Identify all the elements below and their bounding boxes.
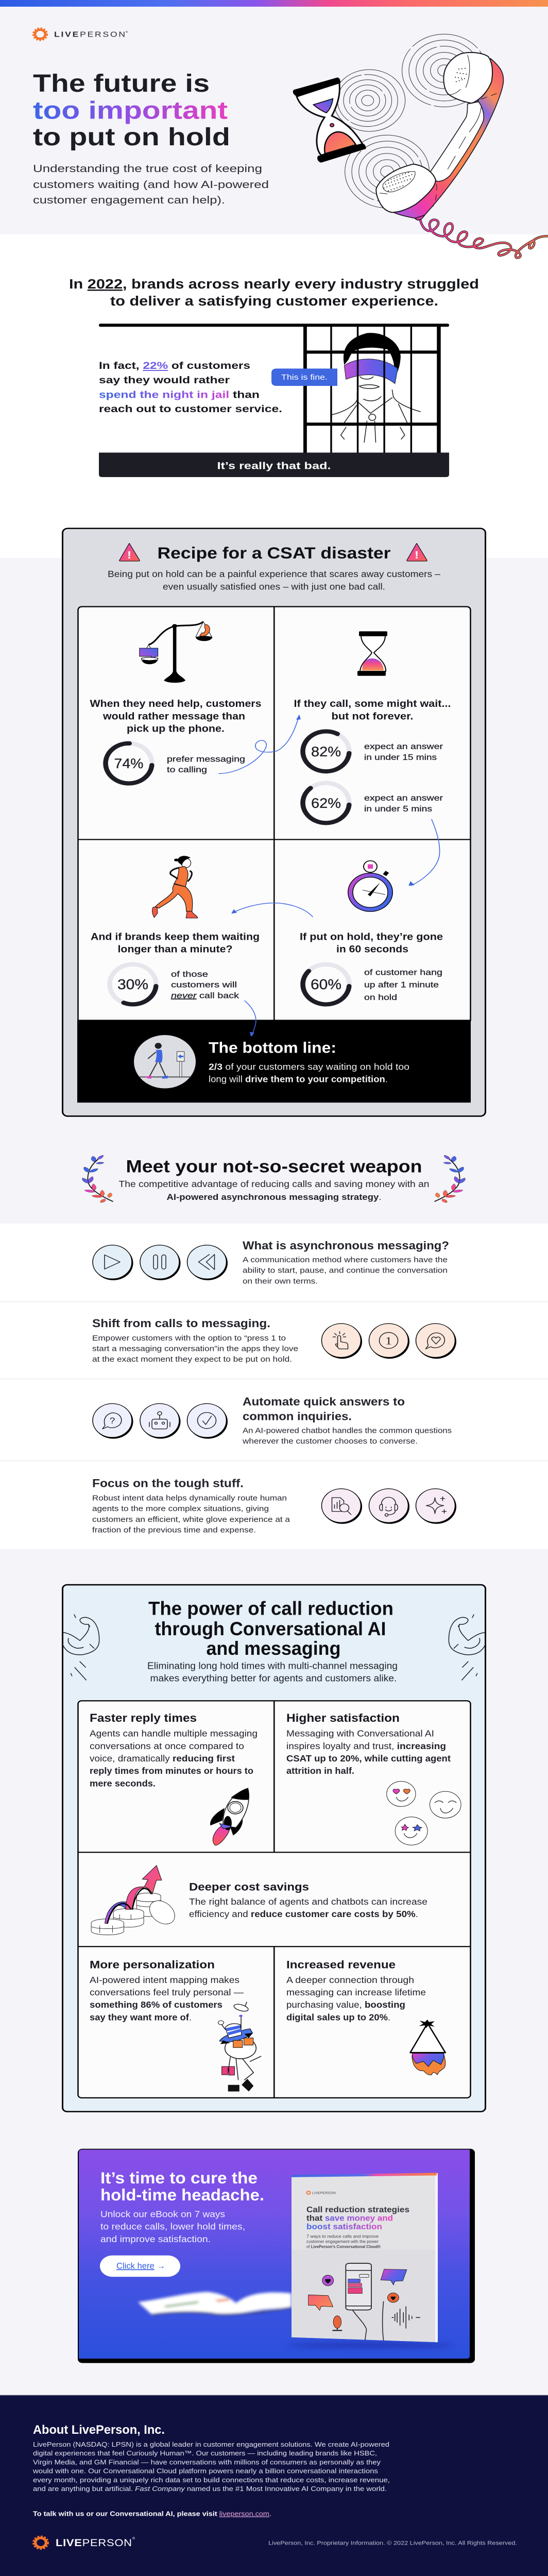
subtitle: customers waiting (and how AI-powered <box>33 179 269 191</box>
text block: at the exact moment they expect to be put on hold. <box>92 1355 292 1364</box>
footer body text: would with one. Our Conversational Cloud platform powers nearly a billion conversational interactions <box>32 2467 378 2475</box>
heading: 2022 statement: In 2022, brands across nearly every industry struggled <box>69 277 479 292</box>
handset back <box>393 59 504 218</box>
icon: number one <box>369 1324 409 1359</box>
card: higher satisfaction: Higher satisfaction <box>286 1712 400 1725</box>
mouthpiece <box>376 164 436 212</box>
text block: A communication method where customers have the <box>243 1256 448 1264</box>
heading: Recipe for a CSAT disaster <box>158 544 390 562</box>
cover title <box>306 2205 409 2231</box>
speech bubble: This is fine. <box>271 368 337 386</box>
icon: party hat with flames <box>410 2020 446 2075</box>
donut: 60%: 60% <box>311 977 341 993</box>
text block: start a messaging conversation”in the apps they love <box>92 1345 298 1353</box>
illustration: eBook cover <box>292 2173 438 2342</box>
icon: check mark <box>187 1403 228 1439</box>
card: more personalization <box>90 1958 261 2091</box>
icon: sparkle <box>416 1489 456 1524</box>
icon: heart bubble <box>416 1324 456 1359</box>
card: deeper cost savings: efficiency and reduce customer care costs by 50%. <box>189 1909 418 1919</box>
text block: Robust intent data helps dynamically route human <box>92 1494 287 1502</box>
footer body text: Virgin Media, and GM Financial — have conversations with millions of consumers as personally as they <box>33 2458 381 2466</box>
footer <box>0 2395 548 2576</box>
panel: jail statistic <box>99 324 449 477</box>
stat label 5 mins: expect an answer <box>364 793 443 803</box>
card: faster reply times: Agents can handle multiple messaging <box>90 1728 258 1738</box>
body text: long will drive them to your competition. <box>209 1074 388 1084</box>
button: click here <box>100 2256 180 2277</box>
icon: rocket <box>210 1788 249 1845</box>
card: faster reply times: mere seconds. <box>90 1778 156 1788</box>
icon: number one: 1 <box>385 1335 392 1347</box>
heading text: If they call, some might wait... <box>294 698 451 709</box>
cover title: that save money and <box>306 2214 393 2223</box>
card: higher satisfaction <box>286 1712 461 1845</box>
donut: 74% <box>104 742 154 785</box>
book shadow <box>288 2342 453 2348</box>
stat label never call back: never call back <box>171 991 239 1000</box>
section heading: not-so-secret weapon: Meet your not-so-secret weapon <box>126 1156 422 1176</box>
stat label: to calling <box>167 765 207 774</box>
section heading: not-so-secret weapon: The competitive advantage of reducing calls and saving money with an <box>118 1179 429 1189</box>
heading text: When they need help, customers <box>90 698 261 709</box>
heading text <box>91 931 260 955</box>
icon: smiley faces <box>387 1782 461 1845</box>
card: deeper cost savings <box>91 1866 427 1935</box>
heading: 2022 statement <box>69 277 479 308</box>
text block: customers an efficient, white glove experience at a <box>92 1516 290 1524</box>
card: increased revenue: messaging can increase lifetime <box>286 1987 426 1997</box>
grid of benefit cards <box>78 1701 471 2098</box>
panel: eBook call to action <box>78 2149 475 2363</box>
footer body text: every month, providing a uniquely rich data set to build connections that reduce costs, increase revenue, <box>33 2476 390 2484</box>
footer logo: LIVEPERSON <box>56 2538 132 2549</box>
arrow: stopwatch to runner <box>231 903 313 917</box>
stat label never call back: of those <box>171 970 208 979</box>
icon: headset agent <box>369 1489 409 1524</box>
cover subtitle: 7 ways to reduce calls and improve <box>306 2234 379 2239</box>
intro text: even usually satisfied ones – with just one bad call. <box>163 582 385 591</box>
text block: agents to the more complex situations, giving <box>92 1505 269 1513</box>
stat label: prefer messaging <box>167 754 245 764</box>
speech bubble: This is fine.: This is fine. <box>281 373 328 382</box>
illustration: phone handset, hourglass and sound rings <box>293 34 548 258</box>
icon: flexed arm right <box>449 1615 485 1680</box>
cover subtitle: of LivePerson’s Conversational Cloud® <box>306 2244 381 2249</box>
icon: laurel left <box>80 1155 113 1203</box>
footer logo: ® <box>132 2537 135 2540</box>
card: more personalization: More personalization <box>90 1958 215 1971</box>
subtitle: customer engagement can help). <box>33 194 225 206</box>
section heading: not-so-secret weapon <box>118 1156 429 1202</box>
text block <box>242 1395 452 1446</box>
row: shift from calls to messaging <box>92 1317 456 1364</box>
text block <box>243 1240 449 1285</box>
icon: play <box>93 1245 133 1280</box>
heading: through Conversational AI <box>155 1618 386 1639</box>
heading: It’s time to cure the <box>100 2170 258 2187</box>
heading: 2022 statement: to deliver a satisfying customer experience. <box>110 294 438 308</box>
icon: rewind <box>187 1245 228 1280</box>
card: increased revenue: A deeper connection through <box>286 1975 414 1985</box>
cover subtitle: customer engagement with the power <box>306 2239 379 2244</box>
card: more personalization: something 86% of customers <box>90 1999 222 2010</box>
heading <box>100 2170 264 2204</box>
card: deeper cost savings: Deeper cost savings <box>189 1880 309 1893</box>
stat label 5 mins <box>364 793 443 814</box>
card: faster reply times <box>90 1712 258 1845</box>
cover subtitle <box>306 2234 381 2249</box>
jail text: say they would rather <box>99 375 230 385</box>
stat label 15 mins: in under 15 mins <box>364 753 437 761</box>
body text <box>100 2210 245 2245</box>
logo: LivePerson header: LIVEPERSON <box>54 30 125 39</box>
donut: 30% <box>108 963 158 1006</box>
jail text: In fact, 22% of customers <box>99 361 250 371</box>
heading text: pick up the phone. <box>127 723 225 734</box>
donut: 74%: 74% <box>114 756 143 772</box>
card: higher satisfaction: Messaging with Conversational AI <box>286 1728 434 1738</box>
card: higher satisfaction: CSAT up to 20%, while cutting agent <box>286 1753 451 1764</box>
icon: coins and rising arrow <box>91 1866 180 1935</box>
body text: 2/3 of your customers say waiting on hold too <box>209 1062 409 1072</box>
hourglass <box>297 82 363 155</box>
phone cord <box>420 219 548 258</box>
card: increased revenue: digital sales up to 20%. <box>286 2012 390 2022</box>
card: increased revenue <box>286 1958 446 2075</box>
donut: 82%: 82% <box>311 744 341 759</box>
section heading: not-so-secret weapon: AI-powered asynchronous messaging strategy. <box>167 1192 381 1202</box>
icon: runner <box>152 856 198 918</box>
heading text: but not forever. <box>332 711 413 722</box>
icon: warning triangle right <box>407 544 427 561</box>
heading text: would rather message than <box>102 711 245 722</box>
bar: It's really that bad.: It’s really that bad. <box>217 461 331 471</box>
cover title: boost satisfaction <box>306 2222 382 2231</box>
heading: The bottom line: <box>209 1039 336 1056</box>
panel: the power of call reduction <box>63 1585 485 2112</box>
handset grip <box>431 101 484 181</box>
copyright notice: LivePerson, Inc. Proprietary Information. © 2022 LivePerson, Inc. All Rights Reserved. <box>268 2539 517 2546</box>
top bar <box>99 324 449 327</box>
donut: 62% <box>301 781 351 825</box>
icon: warning triangle right: ! <box>415 549 419 561</box>
text block: wherever the customer chooses to converse. <box>242 1437 418 1446</box>
card: deeper cost savings: The right balance of agents and chatbots can increase <box>189 1896 427 1907</box>
jail bars <box>303 326 441 454</box>
row: automate quick answers <box>93 1395 452 1446</box>
card: more personalization: say they want more of. <box>90 2012 192 2022</box>
footer body text: digital experiences that feel Curiously Human™. Our customers — including leading brands like HSBC, <box>33 2449 377 2457</box>
footer heading: About LivePerson, Inc. <box>33 2422 165 2436</box>
text block: An AI-powered chatbot handles the common questions <box>243 1427 452 1435</box>
card: faster reply times: reply times from minutes or hours to <box>90 1766 253 1776</box>
text block: common inquiries. <box>243 1410 352 1423</box>
text block: Empower customers with the option to “press 1 to <box>92 1334 286 1343</box>
heading text: And if brands keep them waiting <box>91 931 260 942</box>
icon: stopwatch <box>348 861 393 912</box>
card: increased revenue: Increased revenue <box>286 1958 396 1971</box>
footer body text <box>32 2441 390 2493</box>
button: click here: Click here → <box>116 2261 165 2270</box>
stat label 5 mins: in under 5 mins <box>364 804 432 814</box>
icon: question bubble <box>93 1403 133 1439</box>
panel: the bottom line <box>77 1020 471 1103</box>
text block: fraction of the previous time and expense. <box>92 1527 256 1534</box>
icon: pause <box>140 1245 180 1280</box>
heading text <box>300 931 443 955</box>
stat label never call back: customers will <box>171 980 237 989</box>
subtitle <box>33 162 269 206</box>
icon: blindfolded man behind bars <box>303 326 441 454</box>
intro text <box>108 569 441 591</box>
icon: tap <box>321 1324 362 1359</box>
body text: to reduce calls, lower hold times, <box>100 2222 245 2232</box>
body text: and improve satisfaction. <box>100 2234 211 2245</box>
card: might wait <box>294 631 451 825</box>
subheading: Eliminating long hold times with multi-channel messaging <box>147 1661 398 1671</box>
stat label hang up: of customer hang <box>364 968 442 977</box>
heading text <box>90 698 261 734</box>
donut: 60% <box>301 963 351 1006</box>
jail text <box>99 361 282 415</box>
card: faster reply times: Faster reply times <box>90 1712 197 1725</box>
stat label never call back <box>171 970 239 1000</box>
jail text: spend the night in jail than <box>99 389 260 400</box>
icon: warning triangle left: ! <box>127 549 131 561</box>
footer logo <box>33 2536 135 2549</box>
title: too important <box>33 97 228 124</box>
stat label 15 mins <box>364 742 443 761</box>
subtitle: Understanding the true cost of keeping <box>33 162 262 175</box>
panel: recipe for a CSAT disaster <box>0 529 548 2576</box>
card: increased revenue: purchasing value, boosting <box>286 1999 405 2010</box>
icon: scales <box>140 622 212 683</box>
card: faster reply times: voice, dramatically reducing first <box>90 1753 235 1764</box>
text block: Focus on the tough stuff. <box>92 1477 244 1490</box>
body text <box>209 1062 409 1084</box>
heading text: If put on hold, they’re gone <box>300 931 443 942</box>
logo: LivePerson header: ® <box>126 30 128 34</box>
subheading <box>147 1661 398 1684</box>
heading <box>148 1598 393 1659</box>
heading text: in 60 seconds <box>336 944 408 955</box>
footer body text: LivePerson (NASDAQ: LPSN) is a global leader in customer engagement solutions. We create AI-powered <box>33 2441 389 2448</box>
heading text: longer than a minute? <box>117 944 233 955</box>
icon: robot <box>140 1403 180 1439</box>
icon: flexed arm left <box>63 1615 99 1680</box>
cover logo: LIVEPERSON <box>312 2192 336 2195</box>
icon: data search <box>321 1489 362 1524</box>
earpiece <box>443 53 492 103</box>
donut: 62%: 62% <box>311 796 341 811</box>
icon: laurel right <box>434 1155 467 1203</box>
title: The future is <box>33 70 210 97</box>
intro text: Being put on hold can be a painful experience that scares away customers – <box>108 569 441 579</box>
arrow: wait to stopwatch <box>408 819 440 886</box>
bar: It's really that bad. <box>99 452 449 477</box>
row: focus on the tough stuff <box>92 1477 456 1534</box>
stat label <box>167 754 245 774</box>
card: faster reply times: conversations at once compared to <box>90 1741 244 1751</box>
illustration: blurred open book <box>138 2292 292 2315</box>
logo: LivePerson header <box>33 28 128 40</box>
arrow: prefer messaging to wait <box>219 715 301 774</box>
top gradient bar <box>0 0 548 7</box>
title: to put on hold <box>33 124 230 151</box>
text block <box>92 1477 290 1534</box>
grid of cards <box>78 607 471 1020</box>
row: what is asynchronous messaging <box>93 1240 449 1285</box>
stat label hang up <box>364 968 442 1002</box>
text block <box>92 1317 298 1364</box>
card: more personalization: AI-powered intent mapping makes <box>90 1975 239 1985</box>
title <box>33 70 230 151</box>
card: higher satisfaction: inspires loyalty and trust, increasing <box>286 1741 446 1751</box>
footer body text: and are anything but artificial. Fast Company named us the #1 Most Innovative AI Company in the world. <box>33 2485 387 2493</box>
stat label 15 mins: expect an answer <box>364 742 443 751</box>
cover title: Call reduction strategies <box>306 2205 409 2214</box>
card: prefer messaging <box>90 622 261 785</box>
icon: hourglass <box>357 631 387 676</box>
stat label hang up: up after 1 minute <box>364 980 439 989</box>
heading text <box>294 698 451 722</box>
icon: customer walking away <box>134 1035 196 1089</box>
icon: character with antenna hat <box>218 2002 261 2091</box>
subheading: makes everything better for agents and customers alike. <box>150 1673 397 1684</box>
card: gone in 60 seconds <box>300 861 443 1006</box>
card: more personalization: conversations feel truly personal — <box>90 1987 244 1997</box>
text block: Automate quick answers to <box>243 1395 405 1408</box>
body text: Unlock our eBook on 7 ways <box>100 2210 225 2219</box>
donut: 82% <box>301 730 351 773</box>
text block: Shift from calls to messaging. <box>92 1317 270 1330</box>
donut: 30%: 30% <box>117 977 148 993</box>
text block: What is asynchronous messaging? <box>243 1240 449 1252</box>
heading: The power of call reduction <box>148 1598 393 1619</box>
heading: and messaging <box>206 1638 340 1659</box>
card: longer than a minute <box>91 856 260 1006</box>
card: higher satisfaction: attrition in half. <box>286 1766 354 1776</box>
icon: warning triangle left <box>119 544 140 561</box>
cover illustration: phone and hand <box>309 2263 420 2341</box>
footer contact line: To talk with us or our Conversational AI, please visit liveperson.com. <box>33 2510 271 2517</box>
icon: question bubble: ? <box>110 1416 115 1426</box>
text block: ability to start, pause, and continue the conversation <box>243 1267 448 1275</box>
sound rings <box>334 34 486 208</box>
stat label hang up: on hold <box>364 993 397 1002</box>
heading: hold-time headache. <box>100 2187 264 2204</box>
text block: on their own terms. <box>243 1277 318 1285</box>
jail text: reach out to customer service. <box>99 403 282 415</box>
arrow: never call back to bottom line <box>245 1001 256 1037</box>
